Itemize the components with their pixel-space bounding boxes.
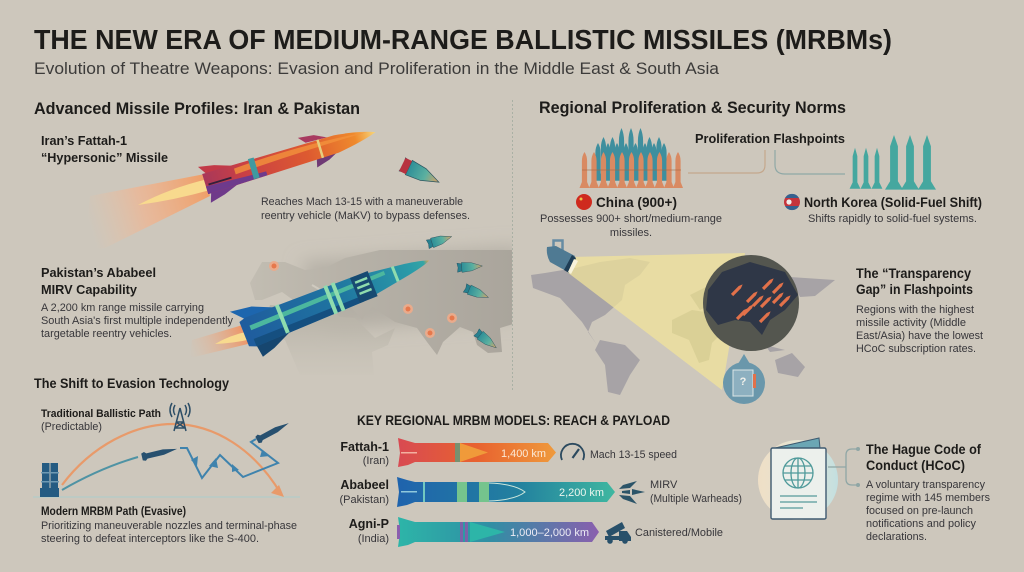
heading: evasion technology: The Shift to Evasion Technology bbox=[34, 375, 229, 391]
icon glow bbox=[758, 440, 838, 520]
label: Fattah-1 bbox=[41, 133, 168, 165]
bar: Agni-P range: 1,000–2,000 km bbox=[510, 527, 589, 539]
text: China description bbox=[540, 213, 722, 239]
icon: North Korea flag bbox=[784, 194, 800, 210]
connector: China bbox=[688, 150, 765, 173]
arrow: evasive zigzag bbox=[180, 439, 278, 478]
missile: evasive second bbox=[255, 419, 291, 444]
label: China: China (900+) bbox=[596, 195, 677, 210]
label: transparency gap bbox=[856, 265, 973, 297]
text: Ababeel description: A 2,200 km range missile carrying bbox=[41, 302, 204, 314]
label: HCoC: The Hague Code of bbox=[866, 442, 981, 457]
connector dots bbox=[856, 447, 860, 487]
label: transparency gap: Gap” in Flashpoints bbox=[856, 281, 973, 297]
icon: HCoC document bbox=[771, 438, 826, 519]
label: Agni-P row bbox=[349, 517, 389, 545]
text: transparency description: HCoC subscription rates. bbox=[856, 343, 976, 355]
text: Fattah-1 description bbox=[261, 196, 470, 222]
label: North Korea: North Korea (Solid-Fuel Shift) bbox=[804, 195, 982, 210]
bar: Fattah-1 range bbox=[398, 438, 556, 467]
label: Fattah-1: Iran’s Fattah-1 bbox=[41, 133, 127, 148]
flame: Ababeel bbox=[190, 324, 252, 358]
icon: radar tower bbox=[170, 403, 190, 431]
arrow: evasive trajectory start bbox=[62, 457, 138, 490]
text: Fattah-1 description: Reaches Mach 13-15 with a maneuverable bbox=[261, 196, 463, 208]
label: traditional path: (Predictable) bbox=[41, 421, 102, 433]
label: Ababeel: MIRV Capability bbox=[41, 282, 138, 297]
label: Agni-P row: Agni-P bbox=[349, 517, 389, 531]
spotlight beam bbox=[567, 253, 745, 390]
text: Ababeel payload: (Multiple Warheads) bbox=[650, 493, 742, 505]
text: North Korea description: Shifts rapidly to solid-fuel systems. bbox=[808, 213, 977, 225]
label: Fattah-1: “Hypersonic” Missile bbox=[41, 150, 168, 165]
heading: key models: KEY REGIONAL MRBM MODELS: REACH & PAYLOAD bbox=[357, 413, 670, 428]
arrowhead: traditional bbox=[271, 485, 284, 497]
text: HCoC description: A voluntary transparency bbox=[866, 479, 985, 491]
icon: North Korea missiles bbox=[850, 135, 936, 190]
magnified globe: Asia bbox=[703, 255, 799, 351]
warheads: MIRV bbox=[426, 232, 499, 352]
label: Fattah-1 row bbox=[340, 440, 389, 467]
warhead: Fattah-1 MaKV bbox=[399, 157, 442, 189]
label: traditional path: Traditional Ballistic Path bbox=[41, 408, 161, 420]
label: Fattah-1 row: Fattah-1 bbox=[340, 440, 389, 454]
heading: flashpoints: Proliferation Flashpoints bbox=[695, 131, 845, 146]
bar: Fattah-1 range: 1,400 km bbox=[501, 448, 546, 460]
missile: evasive first bbox=[141, 445, 178, 461]
map: South Asia backdrop bbox=[250, 244, 512, 355]
text: Fattah-1 description: reentry vehicle (MaKV) to bypass defenses. bbox=[261, 210, 470, 222]
text: HCoC description: regime with 145 members bbox=[866, 492, 990, 504]
label: transparency gap: The “Transparency bbox=[856, 265, 971, 281]
heading: regional proliferation: Regional Proliferation & Security Norms bbox=[539, 98, 846, 117]
text: China description: Possesses 900+ short/medium-range bbox=[540, 213, 722, 225]
label: Agni-P row: (India) bbox=[358, 533, 389, 545]
connector: North Korea bbox=[775, 150, 845, 174]
text: China description: missiles. bbox=[610, 227, 652, 239]
text: evasion description bbox=[41, 520, 297, 545]
label: traditional path bbox=[41, 408, 161, 433]
text: evasion description: Prioritizing maneuverable nozzles and terminal-phase bbox=[41, 520, 297, 532]
text: Ababeel description: South Asia's first multiple independently bbox=[41, 315, 233, 327]
bar: Ababeel range: 2,200 km bbox=[559, 487, 604, 499]
missile: Fattah-1 bbox=[198, 115, 381, 203]
text: transparency description: East/Asia) have the lowest bbox=[856, 330, 983, 342]
text: transparency description: Regions with the highest bbox=[856, 304, 974, 316]
text: HCoC description: notifications and policy bbox=[866, 518, 976, 530]
label: Ababeel row bbox=[339, 478, 389, 506]
text: Ababeel description: targetable reentry vehicles. bbox=[41, 328, 172, 340]
panel: Hague Code of Conduct bbox=[758, 438, 990, 543]
text: HCoC description: focused on pre-launch bbox=[866, 505, 973, 517]
text: Fattah-1 payload: Mach 13-15 speed bbox=[590, 449, 677, 461]
bar: Ababeel range bbox=[397, 477, 615, 507]
label: HCoC bbox=[866, 442, 981, 473]
flame: Fattah-1 bbox=[85, 174, 210, 250]
title: THE NEW ERA OF MEDIUM-RANGE BALLISTIC MISSILES (MRBMs) bbox=[34, 24, 892, 55]
icon: mobile launcher bbox=[605, 522, 631, 544]
icon: document callout: ? bbox=[740, 376, 747, 388]
icon: spotlight bbox=[547, 240, 578, 274]
panel: regional proliferation bbox=[531, 98, 983, 404]
text: HCoC description bbox=[866, 479, 990, 543]
label: HCoC: Conduct (HCoC) bbox=[866, 458, 965, 473]
icon: gauge bbox=[561, 444, 584, 460]
label: modern path: Modern MRBM Path (Evasive) bbox=[41, 506, 186, 518]
text: Ababeel description bbox=[41, 302, 233, 340]
label: Ababeel: Pakistan’s Ababeel bbox=[41, 265, 156, 280]
missile: Ababeel bbox=[230, 236, 439, 362]
subtitle: Evolution of Theatre Weapons: Evasion and Proliferation in the Middle East & South Asia bbox=[34, 59, 720, 78]
label: Ababeel bbox=[41, 265, 156, 297]
ground line bbox=[33, 496, 300, 498]
label: Fattah-1 row: (Iran) bbox=[363, 455, 389, 467]
icon: launcher bbox=[40, 463, 59, 497]
connector bracket bbox=[828, 449, 857, 485]
map markers: targets bbox=[269, 261, 457, 338]
zigzag arrowheads bbox=[191, 450, 270, 472]
text: Ababeel payload: MIRV bbox=[650, 479, 678, 491]
icon: document callout bbox=[723, 354, 765, 404]
text: evasion description: steering to defeat interceptors like the S-400. bbox=[41, 533, 259, 545]
label: Ababeel row: (Pakistan) bbox=[339, 494, 389, 506]
bar: Agni-P range bbox=[397, 517, 599, 547]
text: transparency description: missile activity (Middle bbox=[856, 317, 966, 329]
text: transparency description bbox=[856, 304, 983, 355]
panel: key regional MRBM models bbox=[339, 413, 742, 547]
heading: advanced missile profiles: Advanced Missile Profiles: Iran & Pakistan bbox=[34, 99, 360, 118]
text: Agni-P payload: Canistered/Mobile bbox=[635, 527, 723, 539]
icon: multiple warheads bbox=[619, 481, 645, 504]
text: HCoC description: declarations. bbox=[866, 531, 927, 543]
arrow: traditional trajectory bbox=[62, 424, 281, 494]
panel: advanced missile profiles bbox=[34, 99, 520, 375]
map: world bbox=[531, 258, 835, 395]
panel: shift to evasion bbox=[33, 375, 300, 545]
label: Ababeel row: Ababeel bbox=[340, 478, 389, 492]
text: Ababeel payload bbox=[650, 479, 742, 505]
icon: China flag bbox=[576, 194, 592, 210]
icon: China missile stockpile bbox=[580, 128, 683, 188]
